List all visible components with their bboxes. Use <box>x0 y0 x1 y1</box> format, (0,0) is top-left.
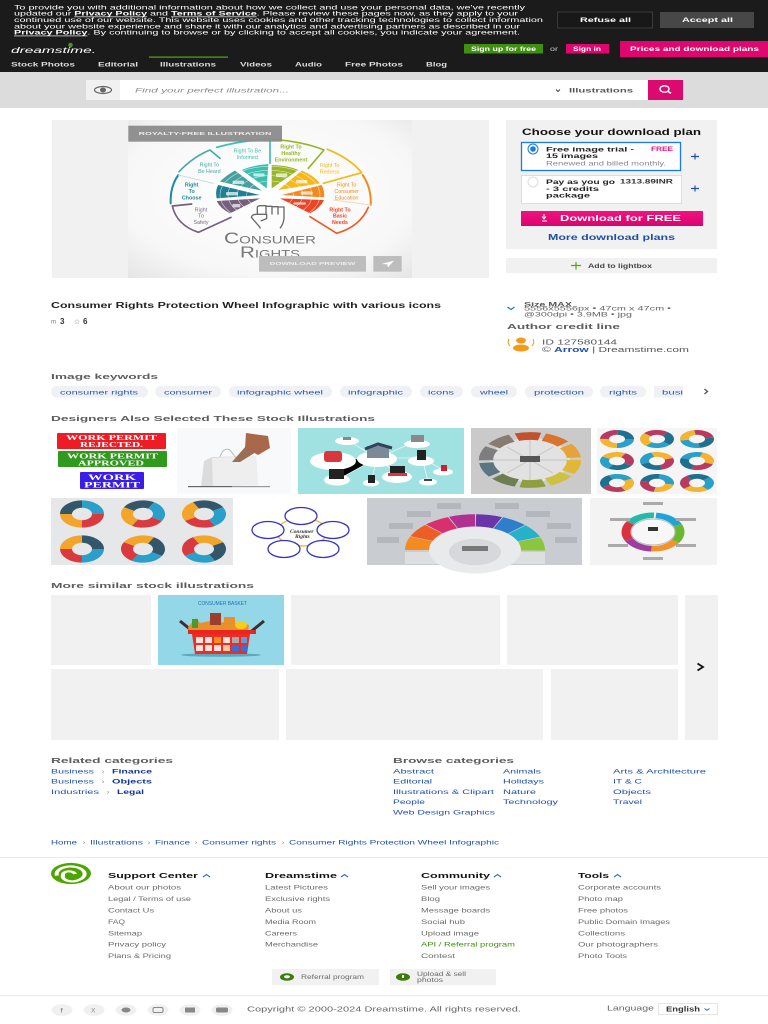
browse categories: Animals <box>503 768 542 776</box>
cookie notice text: updated our Privacy Policy and Terms of Service . Please review these pages now, as they apply to your <box>14 10 519 18</box>
search bar <box>86 80 683 100</box>
footer column: dreamstime: Merchandise <box>265 942 319 948</box>
breadcrumb: Home <box>51 840 77 846</box>
language selector: Language <box>607 1006 654 1012</box>
keyword chips: consumer <box>164 389 213 396</box>
keyword chips: icons <box>428 389 455 396</box>
social icons: X <box>91 1008 96 1014</box>
thumbnail: work permit stamps: WORK PERMIT <box>67 452 158 460</box>
footer column: dreamstime: Media Room <box>265 919 316 926</box>
browse categories: Illustrations & Clipart <box>393 789 494 796</box>
search band <box>0 72 768 108</box>
breadcrumb: Illustrations <box>90 840 144 846</box>
wheel labels: Consumer <box>334 189 359 195</box>
footer logo: green spiral <box>51 863 91 884</box>
keyword chips: rights <box>609 389 638 396</box>
footer column: tools: Corporate accounts <box>578 884 661 892</box>
wheel labels: Basic <box>333 214 347 220</box>
button: download for free: Download for FREE <box>560 213 681 223</box>
wheel labels: Right To <box>329 207 351 213</box>
thumbnail: work permit stamps: WORK <box>88 472 137 482</box>
consumer rights wordmark: CONSUMER <box>224 230 316 247</box>
browse categories: Nature <box>503 789 537 796</box>
wheel labels: Right To <box>200 163 219 169</box>
option: free trial <box>522 142 680 170</box>
option: free trial: Renewed and billed monthly. <box>546 160 666 168</box>
thumbnail: consumer rights circles: Rights <box>294 534 310 540</box>
navigation: Stock Photos <box>11 62 75 68</box>
breadcrumb: › <box>282 840 284 846</box>
footer column: dreamstime: Latest Pictures <box>265 884 328 892</box>
button: download for free <box>521 211 703 226</box>
option: free trial: Free image trial - <box>546 146 634 154</box>
button: add to lightbox: Add to lightbox <box>588 263 652 270</box>
wheel labels: Environment <box>275 157 307 163</box>
breadcrumb <box>51 840 500 846</box>
related categories: Business <box>51 768 95 776</box>
file size details: @300dpi • 3.9MB • jpg <box>524 312 633 318</box>
footer column: tools: Public Domain Images <box>578 919 670 926</box>
related categories: › <box>102 778 104 786</box>
button: send <box>373 256 402 272</box>
related categories: Objects <box>112 778 153 786</box>
placeholder grid <box>51 595 718 740</box>
option: pay as you go: 1313.89INR <box>620 178 673 186</box>
browse categories: Editorial <box>393 778 433 786</box>
button: refuse all <box>558 12 652 28</box>
wheel outer outlines <box>171 139 371 233</box>
footer column: community: Message boards <box>421 908 490 914</box>
thumbnail: nine colored pie charts <box>597 428 717 494</box>
keyword chips: busi <box>662 389 684 396</box>
footer column: tools: Collections <box>578 930 625 938</box>
footer column: support center: Sitemap <box>108 930 143 938</box>
breadcrumb: Finance <box>155 840 190 846</box>
file size details: Size MAX <box>524 302 573 308</box>
cookie notice text: about your website experience and share it with our analytics and advertising partners as described in our <box>14 23 521 30</box>
footer column: dreamstime: About us <box>265 908 302 914</box>
footer column: dreamstime: Exclusive rights <box>265 896 330 903</box>
related categories: Business <box>51 778 95 786</box>
wheel labels: Redress <box>320 169 340 175</box>
search bar: Find your perfect illustration... <box>135 88 289 94</box>
consumer rights wordmark: RIGHTS <box>240 244 300 261</box>
author id and credit: © Arrow | Dreamstime.com <box>542 346 689 354</box>
thumbnail: semicircle gear infographic <box>367 498 582 580</box>
keyword chips: consumer rights <box>60 389 139 396</box>
footer column: community <box>421 871 515 960</box>
language selector <box>607 1004 718 1014</box>
footer column: tools: Photo map <box>578 896 624 903</box>
logo: dreamstime <box>11 43 96 55</box>
button: download preview <box>259 256 366 272</box>
browse categories: Web Design Graphics <box>393 810 496 816</box>
image title: Consumer Rights Protection Wheel Infographic with various icons <box>51 301 442 310</box>
wheel labels: Right <box>185 183 199 189</box>
image stats: 6 <box>83 317 88 326</box>
footer column: dreamstime: Dreamstime <box>265 871 337 880</box>
navigation: Videos <box>240 62 272 68</box>
option: free trial: 15 images <box>546 153 599 160</box>
icon: plus one <box>691 154 699 160</box>
related categories: Legal <box>117 789 144 796</box>
file size details <box>508 302 672 318</box>
button: upload and sell photos <box>390 969 496 985</box>
thumbnail: work permit stamps <box>57 433 167 490</box>
option: pay as you go: - 3 credits <box>546 186 600 193</box>
footer column: community: Blog <box>421 896 441 903</box>
browse categories: People <box>393 799 425 806</box>
wheel labels: Right To <box>280 145 302 151</box>
related categories: › <box>107 789 109 796</box>
cookie notice text: To provide you with additional information about how we collect and use your personal data, we've recently <box>14 4 526 12</box>
footer column: support center: Support Center <box>108 871 198 880</box>
button: upload and sell photos: Upload & sell <box>417 971 466 978</box>
navigation: Editorial <box>98 62 138 68</box>
footer column: support center: About our photos <box>108 884 181 892</box>
footer column: tools: Photo Tools <box>578 953 627 960</box>
button: sign in <box>566 44 609 54</box>
footer column: dreamstime: Careers <box>265 930 297 938</box>
heading: designers also selected: Designers Also Selected These Stock Illustrations <box>51 414 375 423</box>
footer column: tools: Our photographers <box>578 942 658 948</box>
keyword chips: wheel <box>478 389 509 396</box>
footer column: support center: Contact Us <box>108 908 154 914</box>
thumbnail: consumer rights circles: Consumer <box>290 529 314 535</box>
language selector: English <box>666 1006 700 1014</box>
browse categories: Abstract <box>393 768 434 776</box>
button: referral program <box>272 969 379 985</box>
banner: royalty-free illustration <box>128 126 282 142</box>
copyright: Copyright © 2000-2024 Dreamstime. All rights reserved. <box>247 1006 521 1014</box>
button: sign up: Sign up for free <box>471 46 536 53</box>
illustration: consumer rights wheel <box>128 120 412 278</box>
wheel labels: Be Heard <box>198 169 221 175</box>
footer column: community: API / Referral program <box>421 942 515 948</box>
footer column: community: Sell your images <box>421 884 490 892</box>
icon: raised fist <box>251 206 284 229</box>
thumbnail: work permit stamps: PERMIT <box>84 480 141 490</box>
thumbnail: fist in shopping bag <box>177 428 291 494</box>
wheel labels: Healthy <box>281 151 301 157</box>
or label: or <box>550 46 559 53</box>
image stats <box>51 317 88 326</box>
plan heading: Choose your download plan <box>522 127 701 138</box>
image stats: m <box>51 320 56 326</box>
thumbnail: consumer basket <box>158 595 284 665</box>
keyword chips <box>51 386 708 398</box>
panel: download plan <box>506 120 717 249</box>
keyword chips: infographic <box>348 389 404 396</box>
browse categories: Travel <box>613 799 643 806</box>
button: accept all: Accept all <box>682 17 733 24</box>
footer column: dreamstime <box>265 871 348 948</box>
search bar: Illustrations <box>569 88 634 94</box>
button: referral program: Referral program <box>301 974 364 981</box>
heading: more similar stock illustrations: More similar stock illustrations <box>51 581 254 590</box>
thumbnail: work permit stamps: WORK PERMIT <box>66 433 157 442</box>
wheel labels: Safety <box>193 220 209 226</box>
consumer rights wordmark <box>224 230 316 261</box>
button: prices <box>620 41 768 57</box>
browse categories <box>393 756 707 816</box>
banner: royalty-free illustration: ROYALTY-FREE ILLUSTRATION <box>139 131 273 136</box>
wheel inner wedges <box>216 164 324 224</box>
icon: carousel next arrow <box>698 664 703 670</box>
breadcrumb: › <box>195 840 197 846</box>
dark header background <box>0 0 768 72</box>
wheel labels <box>182 145 359 226</box>
main image panel <box>52 120 489 278</box>
icon: author avatar <box>508 338 534 352</box>
related categories: › <box>102 768 104 776</box>
breadcrumb: Consumer Rights Protection Wheel Infographic <box>289 840 500 846</box>
browse categories: Objects <box>613 789 652 796</box>
footer column: community: Contest <box>421 953 455 960</box>
social icons <box>52 1004 232 1016</box>
keyword chips: protection <box>534 389 585 396</box>
footer column: community: Upload image <box>421 930 480 938</box>
navigation: Audio <box>295 62 322 68</box>
wheel labels: Choose <box>182 195 201 201</box>
button: sign in: Sign in <box>573 46 601 53</box>
thumbnail: gray segmented wheel <box>471 428 591 494</box>
button: download preview: DOWNLOAD PREVIEW <box>270 261 356 266</box>
button: sign up <box>464 44 543 54</box>
wheel labels: Informed <box>237 155 258 161</box>
option: pay as you go: Pay as you go <box>546 179 615 186</box>
image stats: ☆ <box>74 318 80 326</box>
file size details: 5556x5556px • 47cm x 47cm • <box>524 306 672 312</box>
thumbnail: six circular charts <box>51 498 233 565</box>
breadcrumb: › <box>148 840 150 846</box>
author id and credit <box>542 340 689 354</box>
button: prices: Prices and download plans <box>630 46 759 53</box>
footer column: tools <box>578 871 670 960</box>
related categories: Industries <box>51 789 100 796</box>
browse categories: Browse categories <box>393 756 514 765</box>
wheel labels: To <box>189 189 195 195</box>
wheel labels: Education <box>335 195 359 201</box>
footer column: support center: FAQ <box>108 919 125 926</box>
icon: plus two <box>691 186 699 192</box>
author id and credit: ID 127580144 <box>542 340 617 346</box>
navigation: Blog <box>426 62 447 68</box>
browse categories: Technology <box>503 799 559 806</box>
browse categories: Arts & Architecture <box>613 768 707 776</box>
social icons: f <box>60 1008 64 1014</box>
heading: image keywords: Image keywords <box>51 372 158 381</box>
navigation: Free Photos <box>345 62 403 68</box>
wheel labels: Right <box>195 207 208 213</box>
related categories: Related categories <box>51 756 173 765</box>
thumbnail: consumer basket: CONSUMER BASKET <box>198 601 247 607</box>
cookie notice text: continued use of our website. This website uses cookies and other tracking technologies to collect information <box>14 17 544 24</box>
cookie notice text: Privacy Policy . By continuing to browse or by clicking to accept all cookies, you indicate your agreement. <box>14 30 520 37</box>
wheel labels: To <box>198 214 204 220</box>
keyword chips: infographic wheel <box>237 389 324 396</box>
option: pay as you go: package <box>546 192 591 200</box>
link: more download plans: More download plans <box>548 232 675 242</box>
button: refuse all: Refuse all <box>580 17 631 24</box>
navigation <box>11 56 447 68</box>
footer column: support center: Privacy policy <box>108 942 167 948</box>
thumbnail: work permit stamps: REJECTED. <box>80 440 143 449</box>
thumbnail: circular arrows infographic <box>590 498 717 565</box>
footer column: support center <box>108 871 210 960</box>
footer column: support center: Legal / Terms of use <box>108 896 192 903</box>
wheel labels: Right To <box>320 163 339 169</box>
wheel labels: Needs <box>332 220 348 226</box>
footer column: tools: Free photos <box>578 908 628 914</box>
thumbnail: consumer rights circles <box>252 508 349 558</box>
related categories: Finance <box>112 768 153 776</box>
button: accept all <box>660 12 754 28</box>
logo: dreamstime: dreamstime. <box>11 46 96 55</box>
related categories <box>51 756 173 796</box>
cookie notice text <box>14 4 544 37</box>
browse categories: Holidays <box>503 778 545 786</box>
option: free trial: FREE <box>651 146 674 153</box>
breadcrumb: Consumer rights <box>202 840 277 846</box>
button: upload and sell photos: photos <box>417 977 443 984</box>
breadcrumb: › <box>83 840 85 846</box>
thumbnail: work permit stamps: APPROVED <box>78 458 145 468</box>
wheel labels: Right To <box>337 183 356 189</box>
browse categories: IT & C <box>613 778 642 786</box>
footer column: tools: Tools <box>578 871 609 880</box>
author credit heading: Author credit line <box>507 322 620 331</box>
image stats: 3 <box>60 317 65 326</box>
footer column: community: Community <box>421 871 491 880</box>
thumbnail: connected devices on teal <box>298 428 464 494</box>
option: pay as you go <box>522 176 682 204</box>
button: add to lightbox <box>506 258 717 273</box>
footer column: support center: Plans & Pricing <box>108 953 172 960</box>
footer column: community: Social hub <box>421 919 466 926</box>
navigation: Illustrations <box>160 62 216 68</box>
wheel labels: Right To Be <box>234 149 261 155</box>
